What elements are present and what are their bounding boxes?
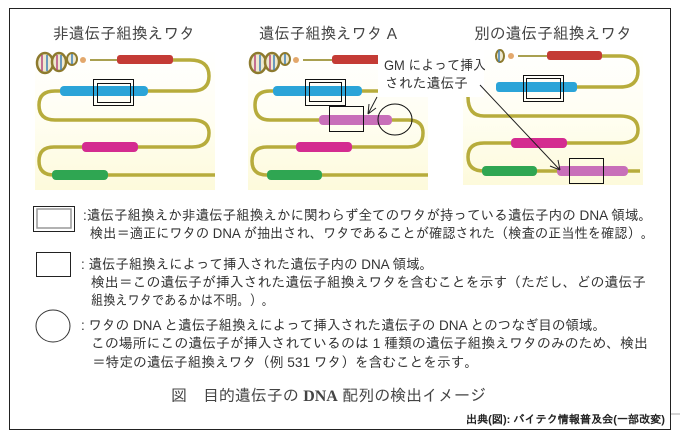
gene: magenta: [511, 138, 567, 148]
callout: inserted gene: された遺伝子: [385, 75, 468, 91]
heading: non-GM cotton: 非遺伝子組換えワタ: [53, 25, 195, 43]
heading: another GM cotton: 別の遺伝子組換えワタ: [474, 25, 632, 43]
text: rectangle description: 組換えワタであるかは不明。）。: [91, 292, 274, 308]
source credit: 出典(図): バイテク情報普及会(一部改変): [466, 413, 665, 426]
figure caption: 図 目的遺伝子の DNA 配列の検出イメージ: [171, 387, 486, 405]
chromosome line: [39, 60, 215, 175]
gene: magenta: [296, 142, 352, 152]
text: double rectangle description: :遺伝子組換えか非遺伝子組換えかに関わらず全てのワタが持っている遺伝子内の DNA 領域。: [83, 207, 652, 223]
chromosome line: [468, 56, 640, 171]
marker: circle: [378, 104, 412, 135]
callout: inserted gene: GM によって挿入: [384, 57, 486, 73]
arrow: to inserted gene: [368, 97, 377, 114]
icon: DNA helix: [37, 53, 86, 73]
text: double rectangle description: 検出＝適正にワタの DNA が抽出され、ワタであることが確認された（検査の正当性を確認）。: [90, 225, 654, 241]
gene: green: [52, 170, 108, 180]
gene: green: [482, 166, 537, 176]
callout: inserted gene: [378, 48, 486, 97]
legend: rectangle: [36, 252, 70, 276]
legend: circle: [36, 310, 70, 342]
text: circle description: この場所にこの遺伝子が挿入されているのは 1 種類の遺伝子組換えワタのみのため、検出: [91, 335, 648, 351]
gene: inserted pink: [557, 166, 628, 176]
gene: blue: [273, 86, 362, 96]
marker: rectangle: [330, 106, 364, 132]
legend: double rectangle: [34, 206, 74, 232]
panel: another GM cotton: [463, 25, 643, 185]
gene: red: [117, 55, 173, 64]
text: circle description: ＝特定の遺伝子組換えワタ（例 531 ワタ）を含むことを示す。: [92, 354, 478, 370]
text: circle description: : ワタの DNA と遺伝子組換えによって挿入された遺伝子の DNA とのつなぎ目の領域。: [81, 317, 606, 333]
gene: inserted pink: [319, 115, 392, 125]
gene: blue: [496, 82, 577, 92]
marker: double rectangle: [306, 80, 346, 106]
marker: rectangle: [570, 158, 604, 184]
gene: magenta: [82, 142, 138, 152]
panel: GM cotton A: [248, 25, 428, 190]
gene: blue: [60, 86, 148, 96]
text: rectangle description: [81, 256, 646, 308]
text: double rectangle description: [83, 207, 654, 241]
arrow: callout to inserted gene: [480, 85, 560, 170]
icon: DNA helix: [496, 50, 514, 62]
gene: red: [547, 51, 602, 60]
gene: green: [267, 170, 322, 180]
gene: red: [332, 55, 388, 64]
marker: double rectangle: [524, 76, 564, 102]
chromosome line: [252, 60, 428, 175]
text: rectangle description: 検出＝この遺伝子が挿入された遺伝子組換えワタを含むことを示す（ただし、どの遺伝子: [91, 274, 646, 290]
heading: GM cotton A: 遺伝子組換えワタ A: [259, 25, 397, 43]
marker: double rectangle: [94, 80, 134, 106]
panel: non-GM cotton: [35, 25, 215, 190]
text: rectangle description: : 遺伝子組換えによって挿入された遺伝子内の DNA 領域。: [81, 256, 433, 272]
text: circle description: [81, 317, 648, 370]
icon: DNA helix: [250, 53, 299, 73]
